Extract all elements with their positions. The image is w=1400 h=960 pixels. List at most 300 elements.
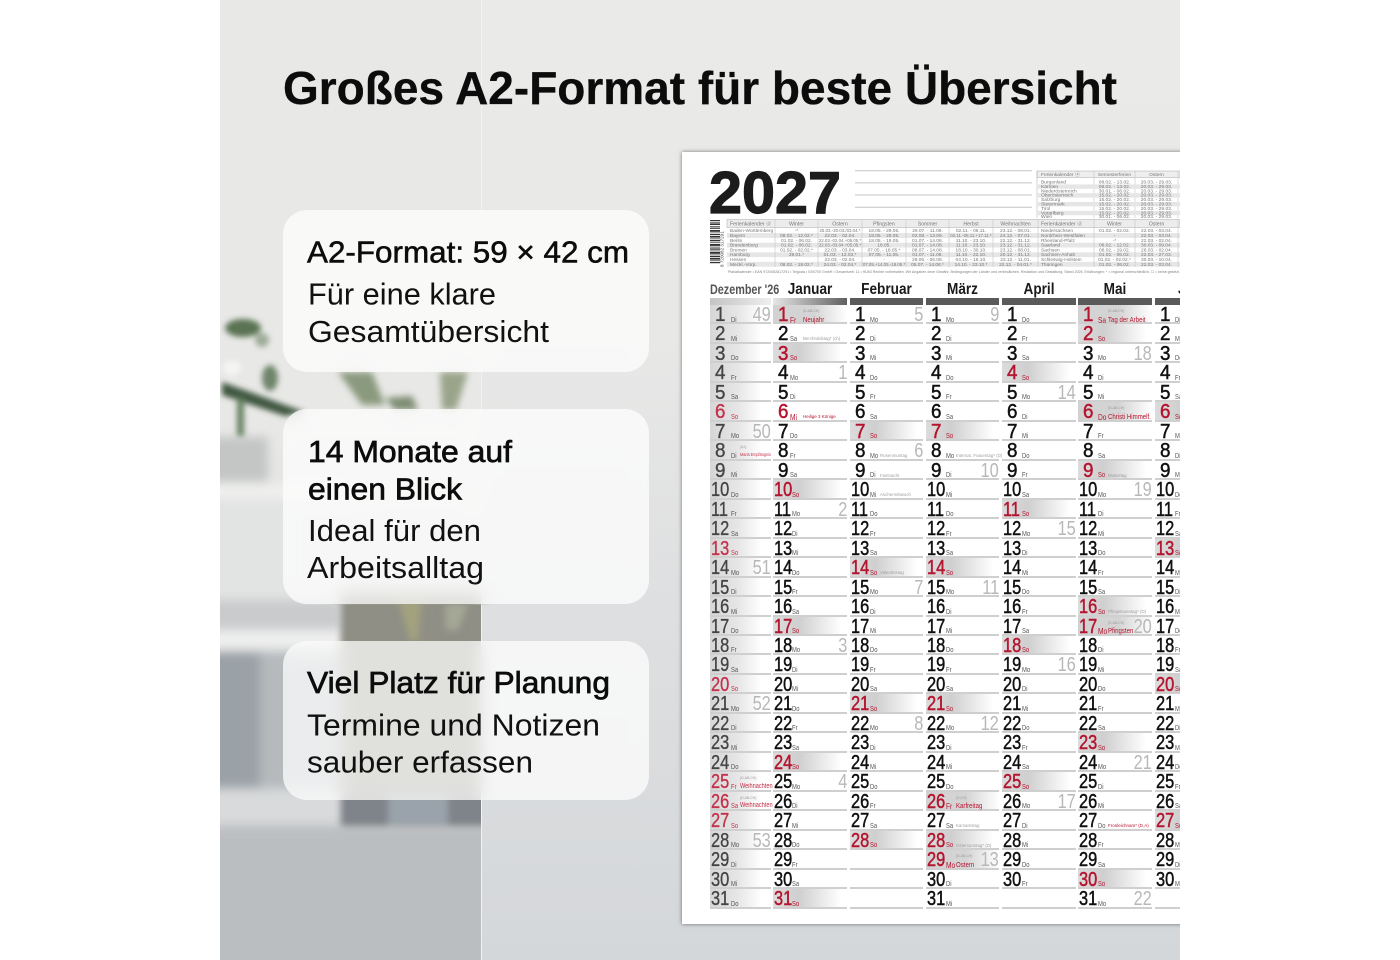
lower holiday table: Germany: Schleswig-Holstein	[1041, 257, 1082, 263]
lower holiday table: Germany: 01.07. - 11.08.	[912, 252, 943, 258]
lower holiday table: Germany: 07.05.+14.05.-18.05.*	[863, 262, 905, 267]
calendar column: Januar: Do	[792, 704, 799, 713]
top right holiday table: Austria: 15.02. - 20.02.	[1099, 206, 1130, 212]
calendar column: Dezember 2026: Sa	[731, 529, 738, 538]
calendar column: Juni: 1	[1160, 304, 1170, 326]
calendar column: Mai: Sa	[1098, 587, 1105, 596]
calendar column: Januar: 25	[774, 771, 792, 793]
calendar column: Dezember 2026: 3	[715, 343, 725, 365]
calendar column: Dezember 2026: 30	[711, 869, 729, 891]
calendar column: Juni: 21	[1156, 693, 1174, 715]
calendar column: Februar: 6	[855, 401, 865, 423]
calendar column: Dezember 2026: Mi	[731, 334, 737, 343]
calendar column: Februar: Mi	[870, 353, 876, 362]
calendar column: Juni: 19	[1156, 654, 1174, 676]
month bar: Dezember	[710, 298, 771, 305]
calendar column: April: 12	[1003, 518, 1021, 540]
lower holiday table: Germany: -	[883, 258, 885, 263]
calendar column: Februar: 22	[851, 713, 869, 735]
lower holiday table: Germany: 22.03. - 03.04.	[1141, 228, 1172, 234]
calendar column: April: 19	[1003, 654, 1021, 676]
top right holiday table: Austria: 20.03. - 29.03.	[1141, 202, 1172, 208]
lower holiday table: Germany: Sachsen	[1041, 247, 1060, 253]
calendar column: März: Di	[946, 334, 951, 343]
calendar column: Februar: Di	[870, 743, 875, 752]
calendar column: März: 9	[990, 303, 999, 326]
lower holiday table: Germany: 28.06. - 06.08.	[912, 257, 943, 263]
calendar column: April: Mi	[1022, 840, 1028, 849]
calendar column: Juni: 15	[1156, 577, 1174, 599]
calendar column: Dezember 2026: Weihnachten	[740, 802, 773, 809]
calendar column: Dezember 2026: Di	[731, 723, 737, 732]
lower holiday table: Germany: -	[1114, 234, 1116, 239]
lower holiday table: Germany: 02.11. - 06.11.	[956, 228, 986, 234]
calendar column: März: 12	[927, 518, 945, 540]
calendar column: Januar	[773, 304, 847, 910]
calendar column: Mai: 24	[1079, 752, 1097, 774]
calendar column: Dezember 2026: (D-AB-CH)	[740, 796, 756, 800]
calendar column: Juni: 26	[1156, 791, 1174, 813]
calendar column: Januar: Fr	[792, 860, 798, 869]
lower holiday table: Germany: Saarland	[1041, 243, 1061, 249]
calendar column: Januar: 2	[838, 498, 847, 521]
calendar column: Juni: 10	[1156, 479, 1174, 501]
calendar column: Mai: Muttertag	[1108, 473, 1127, 478]
calendar column: Mai: 18	[1134, 342, 1152, 365]
calendar column: Mai: 8	[1083, 440, 1093, 462]
lower holiday table: Germany: Rheinland-Pfalz	[1041, 238, 1075, 244]
calendar column: Januar: So	[792, 899, 799, 908]
panel heading: Viel Platz für Planung: Viel Platz für Planung	[307, 665, 610, 700]
calendar column: Dezember 2026: Mariä Empfängnis	[740, 453, 771, 458]
calendar column: März: Do	[946, 373, 953, 382]
lower holiday table: Germany: Hessen	[730, 257, 747, 263]
calendar column: April: Di	[1022, 412, 1027, 421]
calendar column: Juni: 7	[1160, 421, 1170, 443]
calendar column: Januar: 20	[774, 674, 792, 696]
lower holiday table: Germany: 01.07. - 14.08.	[912, 238, 943, 244]
calendar column: Dezember 2026: 24	[711, 752, 729, 774]
panel heading: 14 Monate auf einen Blick: 14 Monate auf	[308, 434, 512, 468]
calendar column: Februar: 2	[855, 323, 865, 345]
calendar column: Januar: 28	[774, 830, 792, 852]
calendar column: April: Fr	[1022, 470, 1027, 479]
calendar column: März: 23	[927, 732, 945, 754]
calendar column: April: 3	[1007, 343, 1017, 365]
calendar column: Mai: Fr	[1098, 840, 1104, 849]
calendar column: Juni: 17	[1156, 616, 1174, 638]
lower holiday table: Germany: 08.02. - 12.02.	[1099, 243, 1130, 249]
calendar column: Januar: So	[792, 626, 799, 635]
calendar column: Februar: Di	[870, 607, 875, 616]
lower holiday table: Germany	[727, 220, 1180, 268]
calendar column: Januar: So	[790, 353, 797, 362]
calendar column: Januar: Sa	[792, 607, 799, 616]
calendar column: Mai: 28	[1079, 830, 1097, 852]
calendar column: Juni: 8	[1160, 440, 1170, 462]
calendar column: Mai: Pfingstsonntag* (D)	[1108, 609, 1146, 614]
calendar column: Dezember 2026: Do	[731, 490, 738, 499]
panel text: Gesamtübersicht: Für eine klare	[308, 276, 496, 311]
calendar column: März: So	[946, 840, 953, 849]
calendar column: Dezember 2026: Mi	[731, 470, 737, 479]
lower holiday table: Germany: 04.10. - 16.10.	[956, 257, 986, 263]
calendar column: März: Fr	[946, 392, 951, 401]
calendar column: Februar: 18	[851, 635, 869, 657]
calendar column: Februar: 20	[851, 674, 869, 696]
calendar column: Mai: So	[1098, 334, 1105, 343]
calendar column: Dezember 2026: 1	[715, 304, 725, 326]
lower holiday table: Germany: 01.02. - 02.02.*	[780, 247, 813, 253]
calendar column: März: Do	[946, 645, 953, 654]
barcode	[710, 220, 724, 267]
calendar column: Januar: 31	[774, 888, 792, 910]
calendar column: April: 28	[1003, 830, 1021, 852]
lower holiday table: Germany: Niedersachsen	[1041, 228, 1073, 234]
calendar column: April: 13	[1003, 538, 1021, 560]
lower holiday table: Germany: 18.05. - 29.05.	[869, 228, 899, 234]
calendar column: Dezember 2026: Fr	[731, 782, 737, 791]
calendar column: Mai: 13	[1079, 538, 1097, 560]
calendar column: Mai: 25	[1079, 771, 1097, 793]
calendar column: März: Internat. Frauentag* (D)	[956, 453, 1002, 458]
calendar column: April: 18	[1003, 635, 1021, 657]
calendar column: Januar: Mo	[792, 782, 800, 791]
month bar: Juni	[1155, 298, 1229, 305]
lower holiday table: Germany: Bremen	[730, 247, 747, 253]
calendar column: März: Di	[946, 743, 951, 752]
panel text: Gesamtübersicht: Gesamtübersicht	[308, 314, 549, 348]
month bar: April	[1002, 298, 1076, 305]
lower holiday table: Germany: 22.03. - 03.04.	[1141, 233, 1172, 239]
calendar column: April: 25	[1003, 771, 1021, 793]
panel text: Arbeitsalltag: Arbeitsalltag	[307, 550, 484, 584]
lower holiday table: Germany: Berlin	[730, 238, 743, 244]
calendar column: Dezember 2026: Mi	[731, 743, 737, 752]
calendar column: Februar: Do	[870, 782, 877, 791]
top right holiday table: Austria: Niederösterreich	[1041, 188, 1077, 194]
calendar column: Dezember 2026: So	[731, 548, 738, 557]
calendar column: Mai: Di	[1098, 645, 1104, 654]
calendar column: Mai: Do	[1098, 412, 1106, 422]
calendar column: Dezember 2026: Mi	[731, 879, 737, 888]
calendar column: Februar: 27	[851, 810, 869, 832]
calendar column: März: 20	[927, 674, 945, 696]
lower holiday table: Germany: 25.03.-30.03./03.04.*	[819, 228, 861, 233]
calendar column: März: Di	[946, 607, 951, 616]
panel: 14 Monate	[282, 408, 648, 604]
lower holiday table: Germany: 11.10. - 22.10.	[956, 252, 986, 258]
calendar column: Januar: 14	[774, 557, 792, 579]
lower holiday table: Germany: Meckl.-Vorp.	[730, 262, 757, 268]
lower holiday table: Germany: 23.12. - 31.12.	[1000, 243, 1031, 249]
lower holiday table: Germany: Thüringen	[1041, 262, 1063, 268]
calendar column: April: 24	[1003, 752, 1021, 774]
calendar column: Mai: Mi	[1098, 801, 1104, 810]
calendar column: April: Do	[1022, 451, 1029, 460]
lower holiday table: Germany: 29.07. - 11.09.	[912, 228, 943, 234]
calendar column: Dezember 2026: Do	[731, 762, 738, 771]
calendar column: März: 30	[927, 869, 945, 891]
calendar column: Mai: So	[1098, 879, 1105, 888]
calendar column: Mai: Sa	[1098, 451, 1105, 460]
calendar column: Dezember 2026: 11	[711, 499, 728, 521]
lower holiday table: Germany: Ferienkalender ⓓ	[730, 220, 771, 228]
calendar header: year, note lines, holiday tables, barcode	[709, 160, 1180, 274]
calendar column: März: 6	[931, 401, 941, 423]
calendar column: Februar: 10	[851, 479, 869, 501]
calendar column: Januar: 12	[774, 518, 792, 540]
calendar column: Dezember 2026: 13	[711, 538, 729, 560]
lower holiday table: Germany: 22.03. - 02.04.	[825, 257, 855, 263]
calendar column: Januar: Heilige 3 Könige	[803, 414, 836, 419]
lower holiday table: Germany: 08.02. - 12.02.*	[780, 233, 813, 239]
calendar column: Juni	[1155, 304, 1180, 909]
top right holiday table: Austria: 15.02. - 20.02.	[1099, 193, 1130, 199]
calendar column: Dezember 2026: 18	[711, 635, 729, 657]
lower holiday table: Germany: 30.03. - 10.04.	[1141, 257, 1172, 263]
lower holiday table: Germany: Brandenburg	[730, 243, 758, 249]
calendar column: Januar: Fr	[790, 314, 796, 324]
calendar column: April: 21	[1003, 693, 1021, 715]
calendar column: Februar: Fr	[870, 529, 875, 538]
calendar column: April: Mi	[1022, 431, 1028, 440]
calendar column: Dezember 2026: 53	[753, 829, 771, 852]
calendar column: Juni: 2	[1160, 323, 1170, 345]
month bar: Februar	[850, 298, 923, 305]
calendar column: Februar: Mo	[870, 314, 878, 324]
calendar column: Dezember 2026: 21	[711, 693, 729, 715]
calendar column: Februar: 12	[851, 518, 869, 540]
calendar column: Januar: Do	[792, 840, 799, 849]
calendar column: Dezember 2026: 16	[711, 596, 729, 618]
calendar column: Mai: 16	[1079, 596, 1097, 618]
calendar column: März: 22	[927, 713, 945, 735]
lower holiday table: Germany: 08.02. - 19.02.	[1099, 247, 1130, 253]
calendar column: April: Fr	[1022, 334, 1027, 343]
calendar column: Januar: 30	[774, 869, 792, 891]
calendar column: Dezember 2026: Sa	[731, 801, 738, 810]
calendar column: Februar: Di	[870, 470, 875, 479]
top right holiday table: Austria	[1037, 171, 1180, 220]
lower holiday table: Germany: 01.02. - 06.02.	[781, 238, 812, 244]
calendar column: April: 15	[1003, 577, 1021, 599]
calendar column: April: Fr	[1022, 743, 1027, 752]
panel text: Termine und Notizen: Termine und Notizen	[307, 708, 600, 742]
calendar column: Januar: Mo	[792, 645, 800, 654]
calendar column: April: Do	[1022, 314, 1029, 324]
calendar column: März: Fr	[946, 801, 952, 811]
calendar column: Mai: 10	[1079, 479, 1097, 501]
calendar column: Januar: Di	[790, 392, 796, 401]
calendar column: Februar: Mo	[870, 451, 878, 460]
calendar column: Mai: 26	[1079, 791, 1097, 813]
calendar column: März: Mi	[946, 762, 952, 771]
calendar column: April: Sa	[1022, 353, 1029, 362]
calendar column: April: 9	[1007, 460, 1017, 482]
calendar column: Februar: 17	[851, 616, 869, 638]
top right holiday table: Austria: Steiermark	[1041, 202, 1065, 208]
calendar column: Dezember 2026: So	[731, 412, 738, 421]
calendar column: Februar: Do	[870, 645, 877, 654]
calendar column: Mai: 9	[1083, 460, 1093, 482]
lower holiday table: Germany: Sachsen-Anhalt	[1041, 252, 1076, 258]
lower holiday table: Germany: -	[796, 258, 798, 263]
lower holiday table: Germany: 18.05. - 28.05.	[869, 233, 899, 239]
calendar column: Februar: Sa	[870, 821, 877, 830]
calendar column: Januar: 27	[774, 810, 792, 832]
calendar column: Januar: Mo	[790, 373, 798, 382]
month bar: März	[926, 298, 999, 305]
calendar column: Februar: 6	[914, 439, 923, 462]
calendar column: Januar: Di	[792, 801, 798, 810]
calendar column: April: 1	[1007, 304, 1017, 326]
calendar column: März: 18	[927, 635, 945, 657]
calendar column: Mai: 2	[1083, 323, 1093, 345]
lower holiday table: Germany: Herbst	[963, 222, 979, 228]
calendar column: Dezember 2026: 49	[753, 303, 771, 326]
calendar column: April: 11	[1003, 499, 1020, 521]
calendar column: Januar: Do	[790, 431, 797, 440]
calendar column: Mai: 29	[1079, 849, 1097, 871]
calendar column: März: 14	[927, 557, 945, 579]
calendar column: April: 17	[1058, 790, 1076, 813]
calendar column: März: Mi	[946, 626, 952, 635]
calendar column: Dezember 2026: 10	[711, 479, 729, 501]
calendar column: Dezember 2026: Do	[731, 899, 738, 908]
calendar column: Februar	[850, 303, 923, 909]
top right holiday table: Austria: 08.02. - 13.02.	[1099, 180, 1130, 186]
calendar column: März: 3	[931, 343, 941, 365]
calendar column: Juni: 25	[1156, 771, 1174, 793]
calendar column: April: 27	[1003, 810, 1021, 832]
calendar column: Mai: 19	[1079, 654, 1097, 676]
calendar column: Dezember 2026: 52	[753, 692, 771, 715]
calendar column: April: Di	[1022, 821, 1027, 830]
lower holiday table: Germany: 24.12. - 07.01.	[1000, 233, 1031, 239]
calendar column: April: 26	[1003, 791, 1021, 813]
calendar column: Juni: 6	[1160, 401, 1170, 423]
top right holiday table: Austria: 30.01. - 06.02.	[1099, 214, 1130, 220]
calendar column: Januar: 16	[774, 596, 792, 618]
background photo: blurred office with shelf and plants	[220, 0, 481, 960]
calendar column: Februar: Fr	[870, 801, 875, 810]
calendar column: Februar: Fastnacht	[880, 473, 899, 478]
calendar column: Dezember 2026: Sa	[731, 665, 738, 674]
calendar column: März: Do	[946, 509, 953, 518]
top right holiday table: Austria: 20.03. - 29.03.	[1141, 184, 1172, 190]
calendar column: Dezember 2026: Mo	[731, 568, 739, 577]
calendar column: Dezember 2026: 28	[711, 830, 729, 852]
calendar column: April: Di	[1022, 684, 1027, 693]
calendar column: Januar: Mo	[792, 509, 800, 518]
top right holiday table: Austria: Semesterferien	[1098, 172, 1131, 178]
calendar column: Februar: Aschermittwoch	[880, 492, 911, 497]
calendar column: Januar: 13	[774, 538, 792, 560]
calendar column: Juni: 20	[1156, 674, 1174, 696]
calendar column: März: 8	[931, 440, 941, 462]
calendar column: Januar: Sa	[792, 879, 799, 888]
calendar column: März: (D,CH)	[956, 796, 967, 800]
calendar column: Februar: So	[870, 704, 877, 713]
calendar column: Januar: Mi	[790, 412, 797, 422]
lower holiday table: Germany: 07.05. - 11.05.	[869, 252, 899, 258]
calendar column: Januar: Di	[792, 665, 798, 674]
calendar column: Dezember 2026: Mo	[731, 431, 739, 440]
calendar column: Februar: 21	[851, 693, 869, 715]
calendar column: Januar: 8	[778, 440, 788, 462]
calendar column: Februar: 9	[855, 460, 865, 482]
calendar column: Mai: 1	[1083, 304, 1093, 326]
calendar column: Dezember 2026: 19	[711, 654, 729, 676]
calendar column: Januar: 3	[778, 343, 788, 365]
calendar column: März: Mo	[946, 314, 954, 324]
calendar column: April: 30	[1003, 869, 1021, 891]
lower holiday table: Germany: Bayern	[730, 233, 746, 239]
top right holiday table: Austria: Salzburg	[1041, 197, 1061, 203]
calendar column: Januar: Neujahr	[803, 314, 824, 324]
lower holiday table: Germany: 20.12. - 31.12.	[1000, 252, 1031, 258]
calendar column: April: 7	[1007, 421, 1017, 443]
calendar column: Mai: 6	[1083, 401, 1093, 423]
calendar column: Dezember 2026: 20	[711, 674, 729, 696]
lower holiday table: Germany: 07.05. - 18.05.*	[868, 247, 901, 253]
calendar column: April: 14	[1003, 557, 1021, 579]
top right holiday table: Austria: 30.01. - 06.02.	[1099, 188, 1130, 194]
calendar column: Juni: 16	[1156, 596, 1174, 618]
month bar: Mai	[1078, 298, 1152, 305]
calendar column: Februar: 1	[855, 304, 865, 326]
calendar column: Mai: 19	[1134, 478, 1152, 501]
calendar column: März: Mo	[946, 587, 954, 596]
calendar column: Februar: 25	[851, 771, 869, 793]
lower holiday table: Germany: 22.03. - 02.04.	[825, 233, 855, 239]
calendar column: Mai: 18	[1079, 635, 1097, 657]
top right holiday table: Austria: Vorarlberg	[1041, 210, 1064, 216]
calendar column: Mai: Christi Himmelf.	[1108, 412, 1151, 421]
calendar column: Dezember 2026: 6	[715, 401, 725, 423]
lower holiday table: Germany: 22.03. - 03.04.	[1141, 262, 1172, 268]
calendar column: Januar: Fr	[792, 723, 798, 732]
calendar column: Februar: 13	[851, 538, 869, 560]
calendar column: Januar: 17	[774, 616, 792, 638]
calendar column: Mai: Do	[1098, 548, 1105, 557]
calendar column: April: Mo	[1022, 665, 1030, 674]
calendar column: Februar: 3	[855, 343, 865, 365]
calendar column: Dezember 2026: Mi	[731, 607, 737, 616]
calendar column: März: 27	[927, 810, 945, 832]
lower holiday table: Germany: 02.08. - 13.09.	[912, 233, 943, 239]
lower holiday table: Germany: Winter	[789, 222, 804, 228]
calendar column: Februar: 28	[851, 830, 869, 852]
calendar column: Juni: 18	[1156, 635, 1174, 657]
calendar column: Juni: 14	[1156, 557, 1174, 579]
calendar column: Dezember 2026: Do	[731, 626, 738, 635]
calendar column: März: Ostersonntag* (D)	[956, 843, 991, 848]
calendar column: April: Mo	[1022, 392, 1030, 401]
lower holiday table: Germany: 08.07. - 14.08.	[912, 247, 943, 253]
calendar column: Dezember 2026: Di	[731, 587, 737, 596]
calendar column: April: Mo	[1022, 529, 1030, 538]
calendar column: März: 17	[927, 616, 945, 638]
calendar column: Mai: 11	[1079, 499, 1096, 521]
lower holiday table: Germany: 22.03. - 27.03.	[1141, 252, 1172, 258]
calendar column: April: 14	[1058, 381, 1076, 404]
lower holiday table: Germany: 01.07. - 14.08.	[912, 243, 943, 249]
calendar column: Februar: Mo	[870, 723, 878, 732]
calendar column: Februar: 8	[914, 712, 923, 735]
calendar column: Mai: Di	[1098, 373, 1104, 382]
